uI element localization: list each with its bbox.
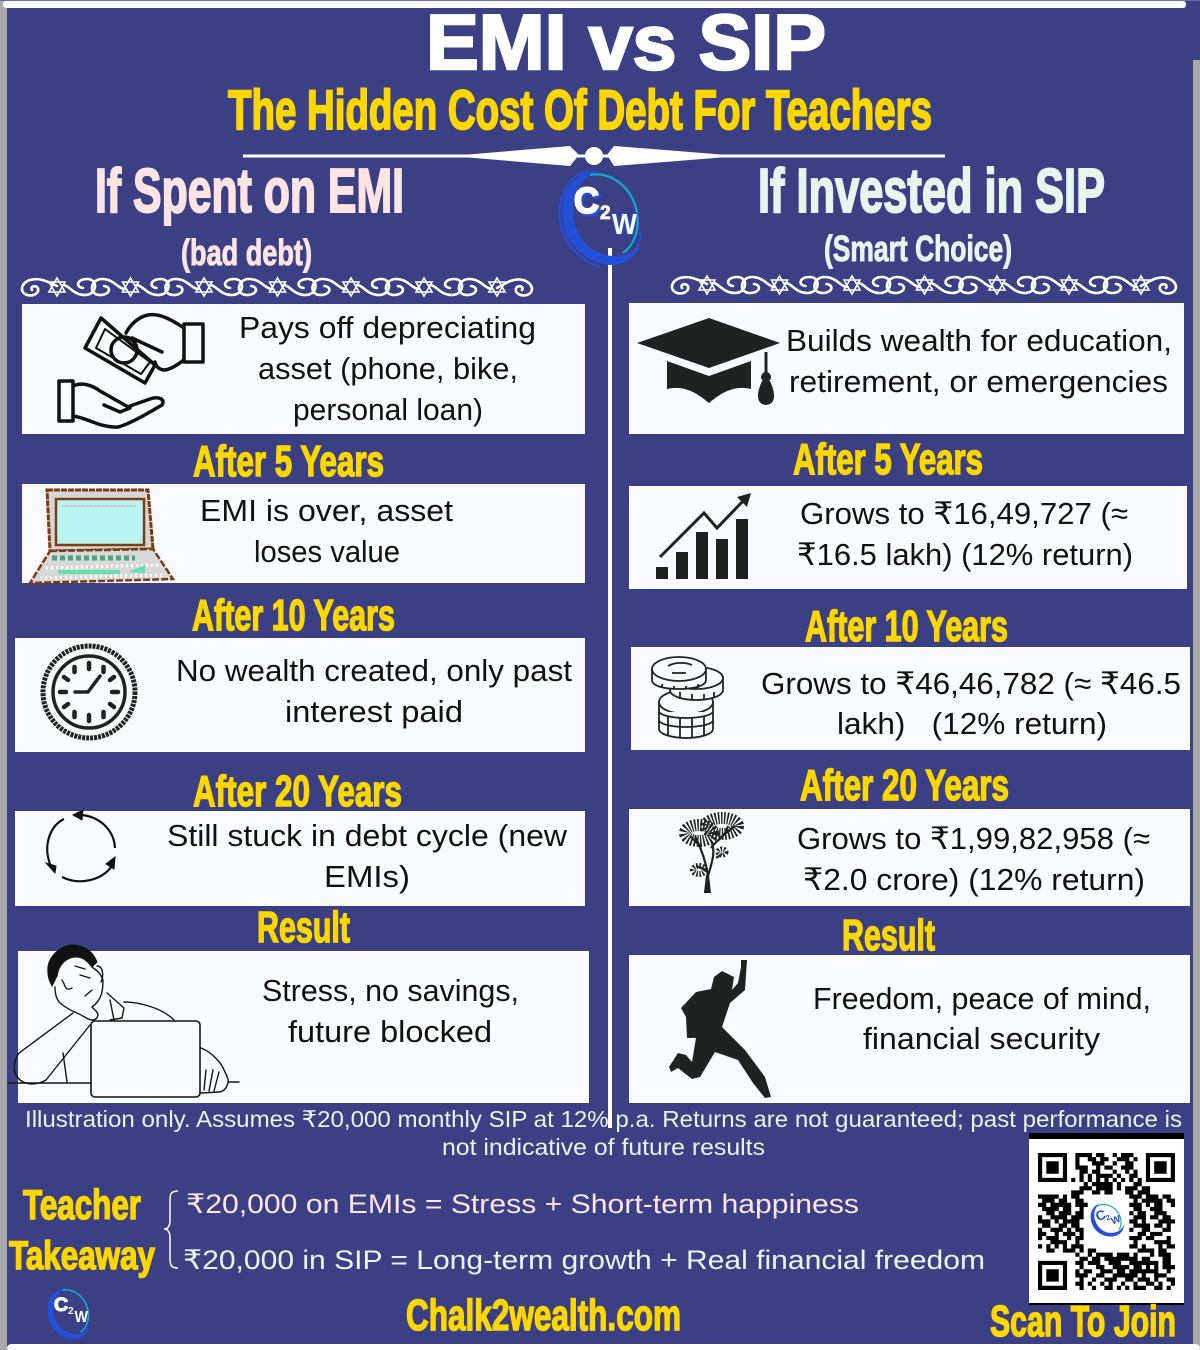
icon: laptop sketch — [30, 490, 173, 583]
heading: after 5 years right: After 5 Years — [793, 435, 983, 484]
panel: pays off depreciating asset — [22, 304, 585, 434]
icon: hands exchanging money — [59, 315, 203, 427]
icon: clock — [43, 646, 135, 738]
text: Builds wealth for education, — [786, 323, 1172, 358]
teacher takeaway label: Teacher — [23, 1181, 141, 1228]
heading: result left: Result — [257, 903, 350, 952]
panel: no wealth created — [15, 638, 585, 752]
right scroll ornament — [672, 276, 1176, 294]
panel: builds wealth — [629, 303, 1184, 434]
heading: after 5 years left: After 5 Years — [193, 437, 384, 486]
icon: QR center logo — [1085, 1197, 1127, 1243]
text: future blocked — [288, 1014, 492, 1049]
text: Pays off depreciating — [239, 310, 536, 345]
logo: C2W: C — [574, 180, 599, 221]
icon: coin stacks — [652, 657, 723, 738]
panel: freedom — [629, 955, 1190, 1103]
left column subheading: (bad debt) — [181, 232, 312, 273]
icon: tree — [685, 818, 738, 893]
heading: after 20 years right: After 20 Years — [800, 761, 1009, 810]
text — [176, 653, 572, 729]
teacher takeaway label — [9, 1181, 156, 1278]
text: ₹16.5 lakh) (12% return) — [797, 537, 1133, 572]
text: EMIs) — [324, 859, 410, 894]
text — [797, 821, 1150, 897]
text: Grows to ₹16,49,727 (≈ — [800, 496, 1128, 531]
text: ₹2.0 crore) (12% return) — [803, 862, 1145, 897]
QR code — [1029, 1133, 1184, 1305]
text: Stress, no savings, — [262, 973, 519, 1008]
heading: after 10 years left: After 10 Years — [192, 591, 395, 640]
title: EMI vs SIP — [426, 0, 826, 86]
text: Still stuck in debt cycle (new — [167, 818, 568, 853]
logo: small C2W: W — [74, 1309, 88, 1326]
logo: small C2W — [47, 1288, 90, 1339]
icon: QR center logo: C — [1094, 1207, 1108, 1224]
heading: result right: Result — [842, 911, 935, 960]
text: Grows to ₹1,99,82,958 (≈ — [797, 821, 1150, 856]
text: Freedom, peace of mind, — [813, 981, 1151, 1016]
logo: small C2W: 2 — [68, 1306, 74, 1317]
teacher takeaway label: Takeaway — [9, 1234, 156, 1278]
panel: stress — [8, 945, 589, 1103]
website: Chalk2wealth.com — [406, 1291, 681, 1340]
icon: QR center logo: 2 — [1105, 1213, 1111, 1222]
text: financial security — [863, 1021, 1101, 1056]
disclaimer: Illustration only. Assumes ₹20,000 monthly SIP at 12% p.a. Returns are not guaranteed; past performance is — [25, 1106, 1182, 1132]
panel: grows to 2 crore — [629, 809, 1190, 906]
text — [167, 818, 568, 894]
icon: graduation cap — [637, 318, 780, 405]
text: No wealth created, only past — [176, 653, 572, 688]
panel: grows to 16.5 lakh — [629, 486, 1187, 589]
logo: C2W: C — [576, 182, 601, 223]
icon: QR center logo: W — [1110, 1214, 1123, 1227]
takeaway line: SIP: ₹20,000 in SIP = Long-term growth + Real financial freedom — [183, 1245, 985, 1275]
text — [797, 496, 1133, 572]
left column heading: If Spent on EMI — [95, 157, 404, 226]
text — [262, 973, 519, 1049]
text: loses value — [254, 534, 400, 569]
icon: growth chart — [656, 493, 751, 579]
text: EMI is over, asset — [200, 493, 453, 528]
text — [786, 323, 1172, 399]
center divider line — [608, 248, 612, 1128]
panel: grows to 46.5 lakh — [631, 647, 1190, 750]
divider ornament — [243, 146, 945, 166]
text: lakh) (12% return) — [837, 706, 1107, 741]
text: asset (phone, bike, — [258, 351, 518, 386]
heading: after 20 years left: After 20 Years — [193, 767, 402, 816]
right column subheading: (Smart Choice) — [824, 228, 1012, 269]
text: interest paid — [285, 694, 463, 729]
left scroll ornament — [22, 278, 532, 296]
panel: stuck in debt cycle — [15, 810, 585, 906]
text: retirement, or emergencies — [789, 364, 1168, 399]
panel: EMI is over — [22, 484, 585, 583]
text — [200, 493, 453, 569]
heading: after 10 years right: After 10 Years — [805, 602, 1008, 651]
text: personal loan) — [293, 392, 483, 427]
text: Grows to ₹46,46,782 (≈ ₹46.5 — [761, 666, 1181, 701]
logo: C2W: 2 — [600, 203, 611, 224]
text — [761, 666, 1181, 741]
logo: C2W: W — [612, 209, 638, 241]
takeaway line: EMI: ₹20,000 on EMIs = Stress + Short-term happiness — [186, 1189, 859, 1219]
logo: small C2W: C — [54, 1294, 68, 1316]
brace — [164, 1191, 178, 1268]
disclaimer: not indicative of future results — [442, 1134, 765, 1160]
icon: cycle arrows — [46, 810, 115, 881]
disclaimer — [25, 1106, 1182, 1160]
text — [239, 310, 536, 427]
logo: C2W — [560, 170, 640, 267]
icon: tired person at laptop — [8, 945, 239, 1097]
icon: jumping person silhouette — [669, 960, 771, 1098]
text — [813, 981, 1151, 1056]
